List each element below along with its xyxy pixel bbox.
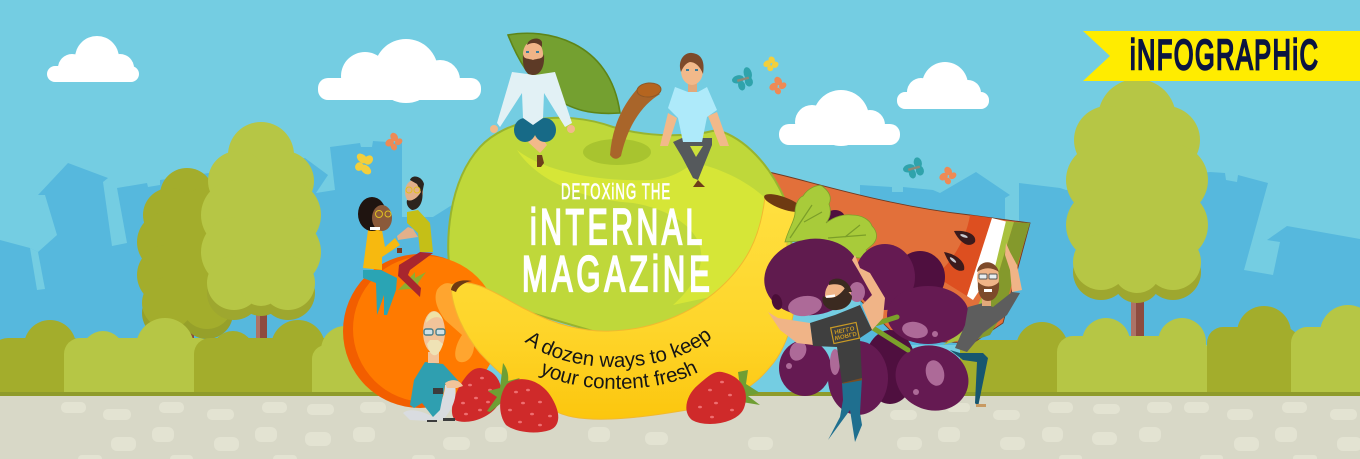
banana stem tip bbox=[762, 191, 804, 215]
watermelon seed upper bbox=[954, 231, 975, 245]
person: top left bearded man on apple bbox=[490, 38, 575, 167]
person: man lifting grapes bbox=[768, 255, 885, 442]
butterfly: orange left bbox=[382, 130, 405, 153]
banner: infographic: iNFOGRAPHiC bbox=[1130, 33, 1318, 79]
t-shirt badge: WORLD bbox=[834, 330, 858, 340]
bushes: left row bbox=[0, 318, 432, 396]
grape highlights bbox=[786, 282, 947, 395]
strawberry: left back bbox=[452, 368, 501, 422]
cloud: right small bbox=[897, 62, 989, 109]
person: woman on orange bbox=[358, 197, 402, 315]
subtitle: your content fresh bbox=[538, 362, 698, 389]
banana bbox=[451, 191, 804, 419]
title: DETOXiNG THE bbox=[561, 180, 670, 204]
person: bearded man on orange bbox=[397, 177, 433, 297]
person: top right man on apple bbox=[660, 53, 729, 187]
butterfly: yellow top bbox=[762, 55, 780, 73]
grape cluster bbox=[758, 231, 978, 421]
leaf bbox=[508, 33, 620, 113]
ground pavement bbox=[0, 392, 1360, 459]
grape stems bbox=[873, 317, 908, 350]
banner: infographic bbox=[1083, 31, 1360, 81]
strawberry: right bbox=[686, 370, 760, 424]
t-shirt badge bbox=[831, 322, 859, 344]
bushes: right row bbox=[960, 305, 1360, 396]
butterfly: teal right bbox=[901, 156, 925, 181]
butterfly: yellow left bbox=[349, 149, 379, 178]
strawberry: left front bbox=[487, 363, 558, 432]
apple bbox=[448, 82, 800, 345]
butterfly: orange top bbox=[766, 74, 789, 97]
butterfly: orange right bbox=[936, 164, 959, 187]
watermelon seed lower bbox=[944, 252, 964, 271]
tree: light left bbox=[201, 122, 321, 348]
subtitle bbox=[524, 330, 710, 389]
cloud: centre right bbox=[779, 90, 900, 146]
title: MAGAZiNE bbox=[522, 245, 710, 302]
orange calyx bbox=[398, 272, 426, 292]
cloud: far left bbox=[47, 36, 139, 82]
city skyline left bbox=[0, 141, 470, 340]
watermelon slice bbox=[768, 172, 1030, 345]
apple stem bbox=[610, 82, 662, 159]
tree: right bbox=[1066, 79, 1208, 348]
apple highlight bbox=[517, 150, 772, 305]
cloud: left large bbox=[318, 39, 481, 103]
tree: dark back left bbox=[137, 168, 237, 350]
orange bbox=[343, 254, 499, 408]
banana end bbox=[451, 280, 472, 292]
grape leaves bbox=[785, 185, 876, 259]
title: iNTERNAL bbox=[530, 199, 702, 255]
butterfly: teal top bbox=[730, 66, 756, 92]
subtitle: A dozen ways to keep bbox=[524, 330, 710, 371]
person: man lifting watermelon bbox=[950, 243, 1022, 407]
city skyline right bbox=[860, 172, 1360, 345]
title bbox=[522, 180, 710, 302]
apple stem shadow bbox=[583, 139, 651, 165]
person: seated man by orange bbox=[403, 311, 463, 422]
t-shirt badge: HELLO bbox=[834, 324, 855, 334]
